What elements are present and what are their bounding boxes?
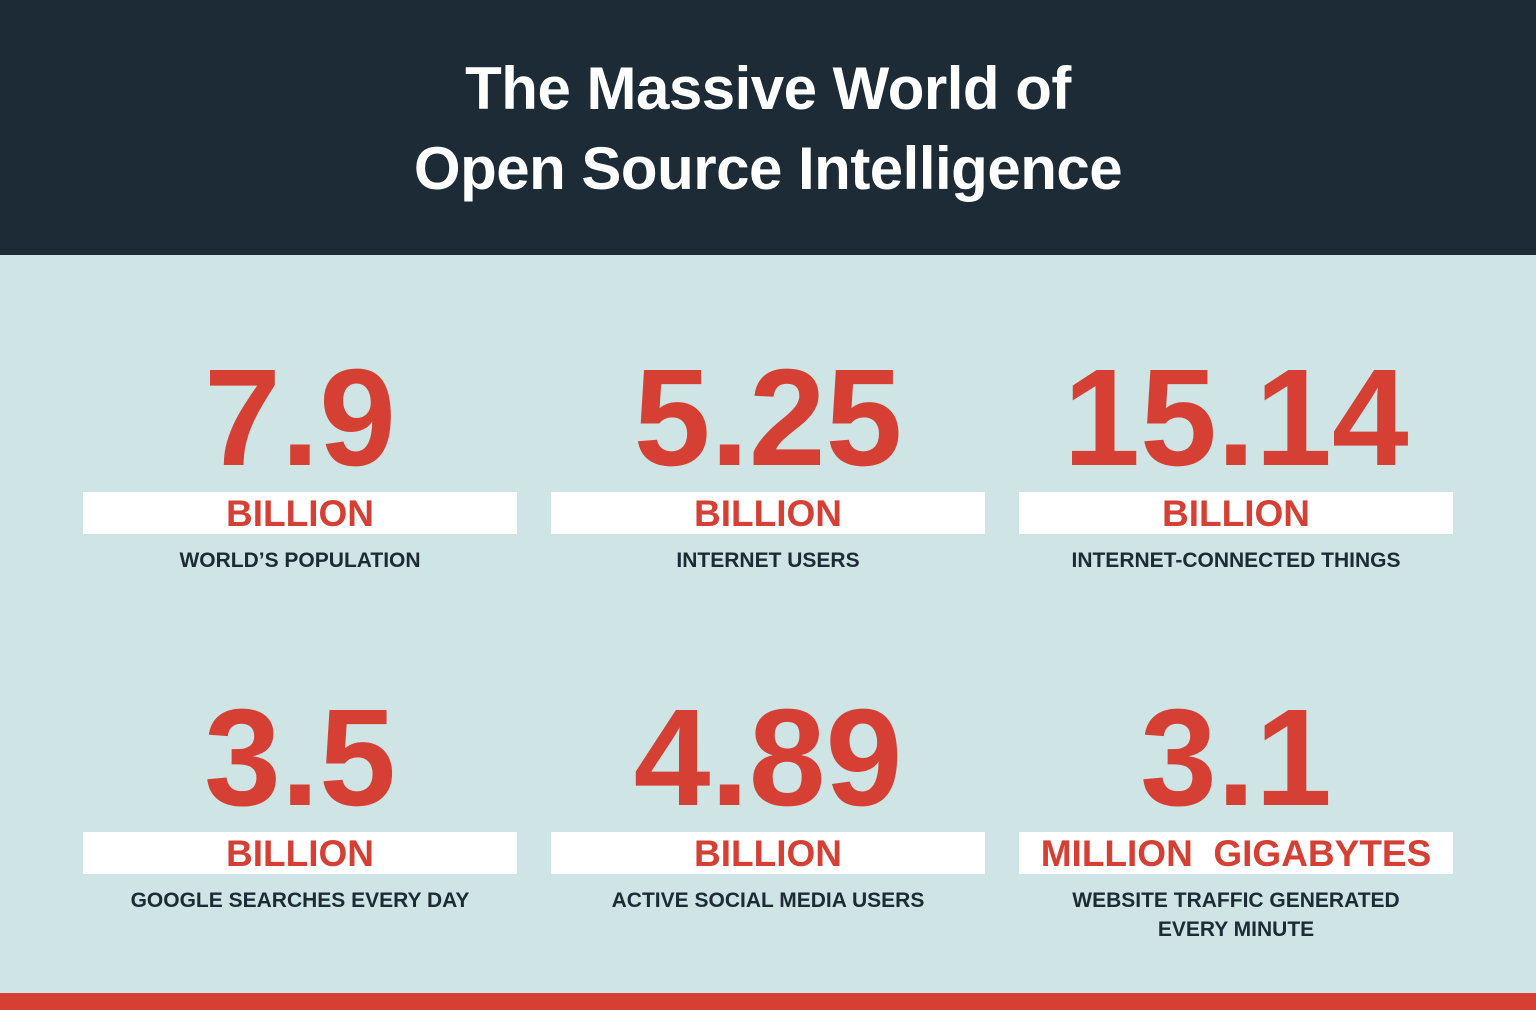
stat: world population <box>83 341 517 572</box>
unit box <box>83 832 517 874</box>
title: Open Source Intelligence <box>414 135 1122 202</box>
unit box <box>551 492 985 534</box>
unit box <box>1019 492 1453 534</box>
number: 4.89 <box>634 681 902 835</box>
label: ACTIVE SOCIAL MEDIA USERS <box>612 889 924 912</box>
label: WORLD’S POPULATION <box>179 549 421 572</box>
title <box>414 55 1122 202</box>
label: EVERY MINUTE <box>1158 918 1314 941</box>
title: The Massive World of <box>465 55 1071 122</box>
number: 5.25 <box>634 341 902 495</box>
stat: connected things <box>1019 341 1453 572</box>
stat: internet users <box>551 341 985 572</box>
header band <box>0 0 1536 255</box>
unit box: BILLION <box>226 833 374 874</box>
label: GOOGLE SEARCHES EVERY DAY <box>131 889 469 912</box>
stat: social media users <box>551 681 985 912</box>
unit box: MILLION GIGABYTES <box>1041 833 1431 874</box>
number: 3.1 <box>1140 681 1332 835</box>
unit box <box>83 492 517 534</box>
number: 7.9 <box>204 341 396 495</box>
unit box: BILLION <box>694 493 842 534</box>
label <box>1072 889 1400 941</box>
unit box: BILLION <box>226 493 374 534</box>
unit box <box>551 832 985 874</box>
unit box: BILLION <box>694 833 842 874</box>
number: 3.5 <box>204 681 396 835</box>
stat: google searches <box>83 681 517 912</box>
label: INTERNET USERS <box>676 549 860 572</box>
footer band <box>0 993 1536 1010</box>
label: INTERNET-CONNECTED THINGS <box>1071 549 1400 572</box>
stat: website traffic <box>1019 681 1453 941</box>
label: WEBSITE TRAFFIC GENERATED <box>1072 889 1400 912</box>
unit box: BILLION <box>1162 493 1310 534</box>
number: 15.14 <box>1063 341 1409 495</box>
